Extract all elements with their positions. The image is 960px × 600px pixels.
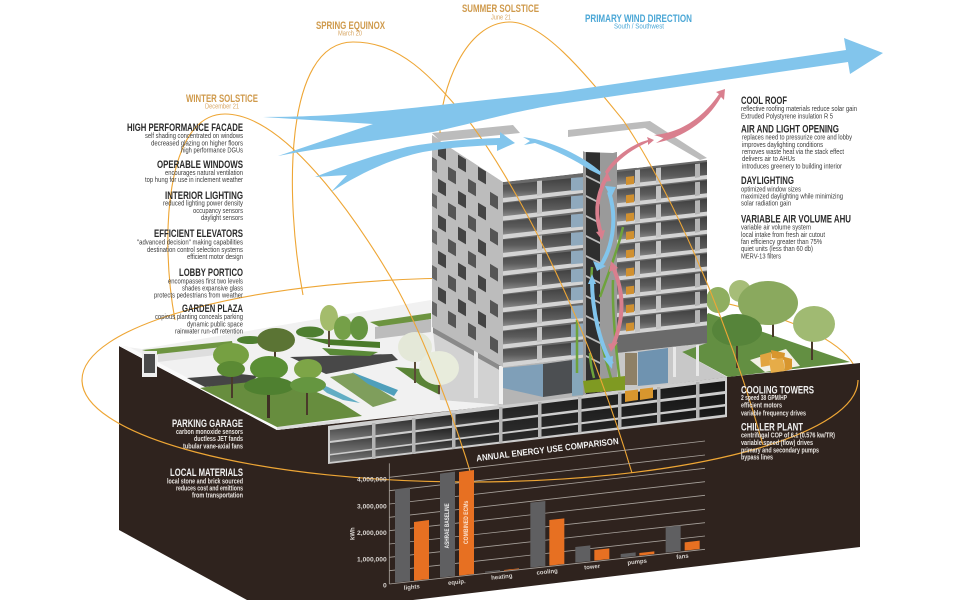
text block: interior lighting: occupancy sensors — [193, 206, 243, 215]
arrow: exhaust to roof — [605, 137, 654, 175]
text block: efficient elevators: efficient motor design — [187, 252, 243, 261]
y axis labels: 0 — [383, 582, 387, 589]
upper lawns — [305, 338, 380, 348]
text block: local materials: reduces cost and emittions — [176, 484, 243, 492]
text block: interior lighting: reduced lighting power density — [163, 198, 243, 208]
right lower lawn — [395, 367, 446, 398]
left plaza ground — [119, 300, 503, 430]
water feature two — [352, 372, 398, 396]
west facade — [432, 135, 503, 367]
text block: air and light opening: removes waste heat via the stack effect — [742, 147, 845, 156]
text block: cooling towers: efficient motors — [741, 400, 782, 410]
text block: garden plaza — [155, 303, 243, 336]
text block: high performance facade: high performance DGUs — [181, 146, 243, 154]
upper terrace with green roof — [370, 313, 431, 339]
text block: interior lighting — [163, 190, 243, 222]
text block: garden plaza: GARDEN PLAZA — [182, 303, 243, 315]
text block: air and light opening: introduces greenery to building interior — [742, 162, 842, 170]
x axis labels: tower — [584, 564, 601, 571]
arrow: exhaust out — [654, 89, 725, 143]
text block: lobby portico: protects pedestrians from weather — [154, 290, 243, 300]
bars: fans — [666, 525, 700, 553]
text block: daylighting — [741, 175, 843, 208]
building — [432, 121, 727, 405]
label: winter solstice: WINTER SOLSTICE — [186, 93, 258, 105]
label: winter solstice — [186, 93, 258, 110]
text block: high performance facade — [127, 122, 243, 154]
label: summer solstice: June 21 — [491, 12, 511, 22]
text block: cool roof — [741, 95, 857, 120]
text block: chiller plant: variable speed (flow) drives — [741, 438, 813, 447]
text block: local materials: from transportation — [192, 490, 243, 500]
tunnel entry with green roof — [142, 341, 233, 377]
x axis labels — [404, 554, 690, 592]
bars: lights — [395, 487, 429, 583]
x axis labels: pumps — [627, 559, 648, 567]
text block: high performance facade: self shading concentrated on windows — [145, 131, 243, 140]
atrium core — [583, 150, 617, 395]
text block: variable air volume ahu: quiet units (less than 60 db) — [741, 244, 813, 253]
x axis labels: lights — [404, 584, 421, 592]
road near — [187, 374, 258, 387]
arrow: secondary wind — [315, 132, 515, 192]
bars: cooling — [530, 501, 564, 568]
text block: variable air volume ahu: variable air volume system — [741, 222, 811, 232]
sun path: winter solstice ellipse back — [82, 278, 858, 380]
text block: efficient elevators: "advanced decision" making capabilities — [137, 238, 243, 246]
text block: operable windows: encourages natural ventilation — [165, 168, 243, 177]
text block: lobby portico — [154, 267, 243, 300]
text block: cooling towers: 2 speed 38 GPM/HP — [741, 393, 787, 402]
text block: chiller plant: primary and secondary pumps — [741, 446, 819, 454]
sun path: spring equinox arc — [292, 42, 632, 473]
text block: variable air volume ahu: fan efficiency greater than 75% — [741, 237, 822, 246]
text block: variable air volume ahu: local intake from fresh air cutout — [741, 230, 826, 239]
y axis unit: kWh — [351, 527, 357, 540]
text block: variable air volume ahu: VARIABLE AIR VOLUME AHU — [741, 214, 851, 226]
text block: variable air volume ahu: MERV-13 filters — [741, 252, 781, 260]
text block: cooling towers: COOLING TOWERS — [741, 384, 814, 396]
text block: lobby portico: encompasses first two levels — [168, 276, 243, 286]
text block: interior lighting: INTERIOR LIGHTING — [165, 190, 243, 202]
facade windows — [432, 139, 498, 354]
east plaza floor — [617, 343, 727, 391]
label: summer solstice — [462, 3, 539, 22]
text block: daylighting: solar radiation gain — [741, 198, 791, 208]
parking garage section — [328, 377, 727, 464]
trees: blossom — [398, 332, 459, 394]
text block: variable air volume ahu — [741, 214, 851, 260]
trees: plaza — [213, 305, 368, 418]
soil block — [119, 346, 860, 600]
text block: lobby portico: LOBBY PORTICO — [179, 267, 243, 279]
text block: parking garage: tubular vane-axial fans — [183, 442, 243, 450]
y axis labels: 4,000,000 — [357, 477, 387, 484]
y axis labels: 2,000,000 — [357, 530, 387, 537]
text block: daylighting: maximized daylighting while minimizing — [741, 192, 843, 200]
label: spring equinox — [316, 20, 385, 38]
road far — [290, 354, 398, 374]
trees: east lawn — [682, 280, 850, 377]
lawn — [200, 380, 362, 427]
roofs — [440, 133, 583, 182]
planting strip — [330, 373, 397, 407]
water feature one — [311, 380, 360, 403]
bars: tower — [575, 545, 609, 563]
sun path: winter solstice arc — [168, 114, 473, 481]
cooling tower units — [760, 350, 792, 373]
text block: local materials: local stone and brick sourced — [167, 476, 243, 486]
arrowheads: airflow down atrium — [588, 186, 616, 369]
text block: air and light opening — [741, 124, 852, 170]
text block: high performance facade: decreased glazing on higher floors — [151, 138, 243, 148]
text block: chiller plant: CHILLER PLANT — [741, 422, 803, 434]
x axis labels: fans — [676, 554, 690, 561]
label: spring equinox: March 20 — [338, 28, 362, 38]
text block: cool roof: reflective roofing materials reduce solar gain — [741, 104, 857, 113]
text block: lobby portico: shades expansive glass — [182, 284, 243, 292]
bar chart: annual energy use comparison — [351, 436, 705, 592]
label: primary wind direction: South / Southwest — [614, 22, 665, 30]
x axis labels: cooling — [536, 569, 558, 577]
text block: garden plaza: dynamic public space — [187, 320, 243, 328]
edge of plaza — [119, 346, 277, 430]
ground floor under facade — [433, 330, 503, 405]
bars: equipment: COMBINED ECMs — [464, 500, 470, 544]
text block: cooling towers — [741, 384, 814, 418]
arrows: exhaust up atrium — [597, 178, 622, 348]
text block: daylighting: optimized window sizes — [741, 184, 801, 194]
text block: efficient elevators: EFFICIENT ELEVATORS — [154, 228, 243, 240]
text block: efficient elevators: destination control selection systems — [147, 245, 243, 254]
label: primary wind direction: PRIMARY WIND DIRECTION — [585, 13, 692, 25]
bars: pumps — [621, 551, 654, 558]
x axis labels: equip. — [448, 579, 466, 587]
text block: parking garage: PARKING GARAGE — [172, 418, 243, 430]
east floors — [617, 160, 707, 353]
label: spring equinox: SPRING EQUINOX — [316, 20, 385, 32]
text block: air and light opening: AIR AND LIGHT OPENING — [741, 124, 839, 136]
text block: high performance facade: HIGH PERFORMANCE FACADE — [127, 122, 243, 134]
sun path: summer solstice arc — [440, 22, 763, 445]
south floors — [503, 173, 583, 367]
y axis labels: 1,000,000 — [357, 557, 387, 564]
text block: operable windows: OPERABLE WINDOWS — [157, 159, 243, 171]
arrow: primary wind large — [263, 38, 883, 156]
y axis labels — [357, 477, 387, 589]
text block: cooling towers: variable frequency drives — [741, 408, 806, 418]
text block: garden plaza: copious planting conceals parking — [155, 312, 243, 321]
text block: air and light opening: delivers air to AHUs — [742, 154, 795, 163]
lobby glass — [503, 364, 543, 397]
text block: chiller plant — [741, 422, 835, 462]
planting bed — [583, 376, 625, 393]
text block: efficient elevators — [137, 228, 243, 261]
text block: operable windows: top hung for use in inclement weather — [145, 175, 243, 184]
green wall vines — [577, 227, 623, 383]
bars: equipment: ASHRAE BASELINE — [445, 503, 451, 548]
text block: cool roof: COOL ROOF — [741, 95, 787, 107]
sun path: winter solstice ellipse front — [82, 380, 858, 482]
text block: parking garage: ductless JET fands — [194, 434, 243, 443]
label: primary wind direction — [585, 13, 692, 30]
text block: air and light opening: replaces need to pressurize core and lobby — [742, 132, 852, 142]
chart grid lines — [389, 441, 705, 584]
chart title: ANNUAL ENERGY USE COMPARISON — [476, 436, 619, 463]
text block: cool roof: Extruded Polystyrene insulation R 5 — [741, 112, 833, 120]
text block: operable windows — [145, 159, 243, 184]
chiller equipment boxes — [625, 390, 638, 402]
bars: equipment — [440, 470, 474, 578]
text block: chiller plant: bypass lines — [741, 452, 773, 462]
arrowheads: exhaust up atrium — [596, 171, 618, 352]
text block: garden plaza: rainwater run-off retention — [175, 326, 243, 336]
y axis labels: 3,000,000 — [357, 503, 387, 510]
south lobby floor — [503, 358, 583, 405]
text block: air and light opening: improves daylighting conditions — [742, 140, 823, 149]
x axis labels: heating — [491, 574, 513, 582]
text block: local materials — [167, 467, 243, 500]
text block: parking garage — [172, 418, 243, 450]
label: winter solstice: December 21 — [205, 102, 239, 110]
arrow: air into atrium — [523, 137, 601, 175]
text block: chiller plant: centrifugal COP of 6.1 (0.576 kw/TR) — [741, 430, 835, 440]
text block: local materials: LOCAL MATERIALS — [170, 467, 243, 479]
text block: interior lighting: daylight sensors — [201, 213, 243, 222]
text block: daylighting: DAYLIGHTING — [741, 175, 794, 187]
text block: parking garage: carbon monoxide sensors — [176, 427, 243, 436]
bars: heating — [485, 568, 519, 573]
arrows: airflow down atrium — [592, 192, 613, 364]
label: summer solstice: SUMMER SOLSTICE — [462, 3, 539, 15]
